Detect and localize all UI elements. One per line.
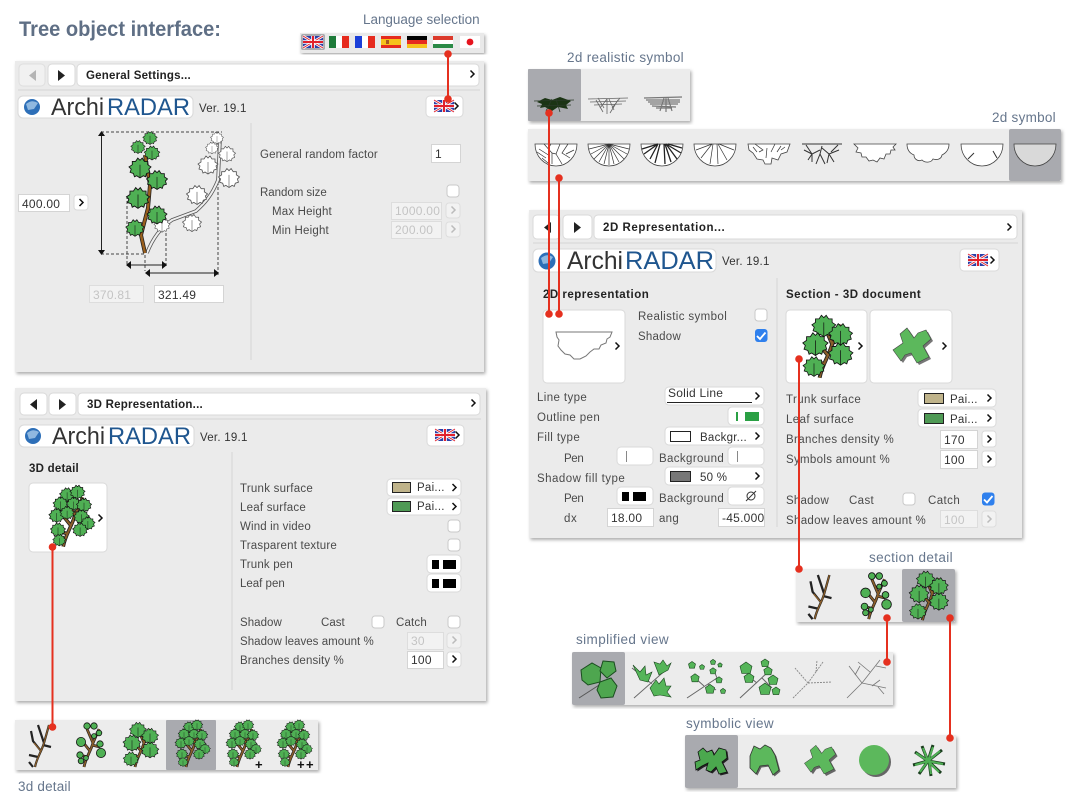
shadow row: Catch: [396, 617, 427, 629]
simplified view caption: simplified view: [576, 632, 669, 647]
shadow leaves row: 30: [411, 634, 425, 648]
green plant: [126, 132, 168, 253]
shadow leaves row: 100: [944, 513, 965, 527]
shadow pen and background row: [564, 487, 764, 505]
section selector: [78, 393, 480, 415]
ArchiRADAR logo: Archi: [51, 94, 104, 121]
language flags strip: [300, 33, 484, 53]
symbol 4: [694, 144, 736, 166]
plant size diagram: [98, 131, 240, 277]
option: most leaves: +: [297, 757, 305, 772]
strip: 2d symbols: [528, 129, 1061, 181]
panel: general settings: [15, 61, 484, 372]
shadow option: [638, 329, 768, 343]
shadow option: Shadow: [638, 331, 681, 343]
3D detail heading: 3D detail: [29, 463, 79, 475]
branches density row: 170: [944, 433, 965, 447]
2d symbol caption: 2d symbol: [992, 110, 1056, 125]
max height: 1000.00: [395, 204, 440, 218]
option: ball leaves: [861, 573, 891, 619]
flag: Spain: [381, 36, 401, 48]
shadow offset row: [564, 508, 765, 526]
section selector: General Settings...: [86, 70, 191, 82]
3d detail caption: 3d detail: [18, 779, 71, 794]
shadow pen and background row: Background: [659, 493, 724, 505]
symbol 7: [854, 144, 896, 162]
option: big leaves: [909, 571, 949, 620]
transparent texture row: [240, 539, 460, 552]
option: circle: [859, 745, 891, 777]
ArchiRADAR logo: [18, 94, 193, 121]
strip: section detail: [796, 569, 955, 622]
flag: Germany: [407, 36, 427, 48]
shadow offset row: dx: [564, 513, 577, 525]
random size: [260, 185, 459, 199]
symbol 10 selected: [1014, 144, 1056, 166]
symbols amount row: [786, 450, 996, 468]
language button: [426, 96, 463, 117]
option: medium leaves: [175, 720, 210, 767]
connector: section detail: [795, 355, 803, 573]
max height: [272, 202, 460, 220]
ArchiRADAR logo: RADAR: [108, 423, 191, 450]
flag: Japan: [460, 36, 480, 48]
leaf surface row: Leaf surface: [786, 414, 854, 426]
option: smooth blob: [804, 745, 838, 776]
2d realistic symbol caption: 2d realistic symbol: [567, 50, 684, 65]
disabled width field: [90, 286, 144, 302]
ArchiRADAR logo: RADAR: [107, 94, 190, 121]
panel: 3D representation: [15, 388, 486, 701]
shadow row: Cast: [849, 495, 875, 507]
connector: 2D symbol: [555, 174, 563, 318]
section heading: Section - 3D document: [786, 289, 921, 301]
trunk pen row: [240, 555, 461, 573]
symbols amount row: 100: [944, 453, 965, 467]
shadow row: Shadow: [240, 617, 282, 629]
realistic symbol: colour: [534, 97, 574, 112]
option: sharp leaves: [632, 660, 671, 698]
option: more leaves: [226, 720, 263, 772]
option: polygons: [579, 661, 617, 698]
shadow leaves row: [786, 510, 996, 528]
ArchiRADAR logo: Archi: [567, 247, 623, 275]
nav forward button: [48, 64, 75, 86]
option: dense thin branches: [847, 660, 886, 698]
symbol 5: [748, 144, 790, 164]
outline pen row: Outline pen: [537, 412, 600, 424]
option: more leaves: +: [255, 757, 263, 772]
general random factor: 1: [435, 147, 442, 161]
shadow offset row: 18.00: [611, 511, 642, 525]
3D detail button: [29, 483, 107, 552]
symbol 3: [641, 144, 683, 166]
symbol 1: [535, 144, 577, 166]
leaf surface row: Pai...: [950, 414, 978, 426]
branches density row: [786, 430, 996, 448]
fill type row: [537, 427, 764, 445]
ArchiRADAR logo: [19, 423, 194, 450]
nav forward button: [563, 215, 592, 239]
shadow row: Shadow: [786, 495, 829, 507]
line type row: Line type: [537, 392, 587, 404]
shadow fill type row: 50 %: [700, 472, 727, 484]
ArchiRADAR logo: RADAR: [625, 247, 714, 275]
line type row: Solid Line: [668, 386, 723, 400]
min height: [272, 222, 460, 238]
shadow leaves row: Shadow leaves amount %: [240, 636, 374, 648]
section detail button: [786, 310, 867, 383]
leaf surface row: [786, 409, 996, 427]
language button: [427, 425, 464, 446]
connector: 2D realistic: [545, 109, 553, 318]
symbol 9: [961, 144, 1003, 166]
trunk surface row: Pai...: [417, 482, 445, 494]
nav forward button: [49, 393, 76, 415]
option: most leaves: +: [306, 757, 314, 772]
flag: Hungary: [433, 36, 453, 48]
language selection label: Language selection: [363, 12, 480, 27]
fill pen and background row: Pen: [564, 453, 584, 465]
option: thin branches: [793, 660, 832, 698]
ghost plant: [147, 132, 240, 253]
symbolic view caption: symbolic view: [686, 716, 774, 731]
strip: simplified view: [572, 652, 893, 705]
shadow leaves row: Shadow leaves amount %: [786, 515, 926, 527]
general random factor: General random factor: [260, 149, 378, 161]
connector: simplified view: [883, 614, 891, 666]
fill type row: Fill type: [537, 432, 580, 444]
shadow leaves row: [240, 632, 461, 650]
max height: Max Height: [272, 206, 333, 218]
panel: 2D representation: [529, 210, 1022, 538]
leaf surface row: Pai...: [417, 501, 445, 513]
wind in video row: Wind in video: [240, 521, 311, 533]
symbol 6: [802, 144, 842, 164]
section detail caption: section detail: [869, 550, 953, 565]
trunk surface row: [240, 479, 461, 496]
branches density row: Branches density %: [240, 655, 344, 667]
realistic symbol option: Realistic symbol: [638, 311, 727, 323]
symbol 8: [907, 144, 949, 162]
option: small leaves: [687, 659, 726, 698]
leaf pen row: Leaf pen: [240, 578, 285, 590]
ArchiRADAR logo: Archi: [52, 423, 105, 450]
option: large leaves: [123, 722, 159, 767]
tree height field: 400.00: [22, 197, 60, 211]
realistic symbol: dark: [588, 98, 628, 114]
option: ball leaves: [76, 723, 106, 767]
section selector: 3D Representation...: [87, 399, 203, 411]
symbol 2: [588, 144, 630, 166]
strip: 2d realistic symbols: [528, 69, 690, 121]
nav back button: [20, 393, 47, 415]
fill pen and background row: [564, 447, 764, 465]
trunk surface row: Trunk surface: [786, 394, 861, 406]
nav back button: [19, 64, 45, 86]
general random factor: [260, 144, 460, 162]
trunk surface row: Trunk surface: [240, 483, 313, 495]
strip: 3D detail options: [15, 720, 318, 772]
option: most leaves: [277, 720, 314, 772]
flag: Italy: [329, 36, 349, 48]
fill type row: Backgr...: [700, 432, 747, 444]
shadow row: [786, 492, 994, 507]
trunk pen row: Trunk pen: [240, 559, 293, 571]
symbols amount row: Symbols amount %: [786, 454, 890, 466]
shadow fill type row: Shadow fill type: [537, 473, 625, 485]
connector: symbolic view: [946, 614, 954, 742]
disabled width field: 370.81: [93, 288, 131, 302]
outline pen row: [537, 407, 764, 425]
section selector: [594, 215, 1017, 239]
width field: 321.49: [158, 288, 196, 302]
line type row: [537, 386, 764, 405]
min height: Min Height: [272, 225, 330, 237]
random size: Random size: [260, 187, 327, 199]
trunk surface row: [786, 389, 996, 407]
option: dark blob: [695, 748, 728, 776]
strip: symbolic view: [685, 735, 956, 788]
flag: France: [355, 36, 375, 48]
version: Ver. 19.1: [199, 103, 247, 115]
min height: 200.00: [395, 223, 433, 237]
ArchiRADAR logo: [533, 247, 716, 275]
transparent texture row: Trasparent texture: [240, 540, 337, 552]
language button: [960, 249, 999, 271]
branches density row: [240, 652, 461, 668]
leaf pen row: [240, 574, 461, 592]
section symbol button: [870, 310, 952, 383]
title: Tree object interface:: [19, 18, 221, 41]
realistic symbol: grey: [644, 97, 682, 112]
shadow pen and background row: Pen: [564, 493, 584, 505]
branches density row: Branches density %: [786, 434, 894, 446]
leaf surface row: Leaf surface: [240, 502, 306, 514]
shadow row: Catch: [928, 495, 960, 507]
option: bare: [808, 575, 832, 619]
shadow row: Cast: [321, 617, 346, 629]
shadow fill type row: [537, 467, 764, 485]
nav back button: [533, 215, 560, 239]
section selector: 2D Representation...: [603, 222, 725, 234]
flag: UK: [303, 36, 323, 48]
option: medium leaves: [740, 659, 780, 698]
tree height field: [18, 194, 88, 212]
branches density row: 100: [411, 653, 432, 667]
shadow offset row: -45.000: [722, 511, 765, 525]
option: spiky: [913, 745, 945, 776]
width field: [154, 286, 224, 302]
connector: language: [444, 50, 452, 103]
wind in video row: [240, 520, 460, 533]
2D symbol button: [543, 310, 625, 383]
shadow offset row: ang: [659, 513, 679, 525]
option: bare tree: [29, 725, 51, 767]
option: rough blob: [750, 745, 780, 776]
2D representation heading: 2D representation: [543, 289, 649, 301]
shadow row: [240, 616, 460, 629]
trunk surface row: Pai...: [950, 394, 978, 406]
connector: 3D detail: [49, 543, 56, 731]
section selector: [77, 64, 479, 86]
realistic symbol option: [638, 309, 767, 323]
version: Ver. 19.1: [200, 432, 248, 444]
fill pen and background row: Background: [659, 453, 724, 465]
leaf surface row: [240, 498, 461, 515]
version: Ver. 19.1: [722, 256, 770, 268]
